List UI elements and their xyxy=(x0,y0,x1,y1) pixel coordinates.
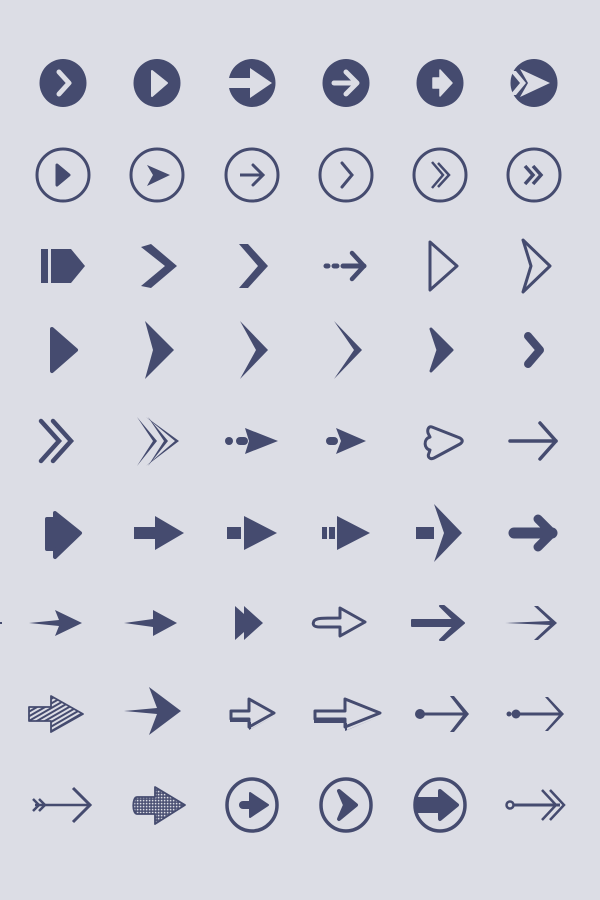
icon: r2c6 outline circle bold double chevron xyxy=(508,149,560,201)
icon: r4c5 chevron xyxy=(431,329,452,371)
icon: r9c4 circle with chevron xyxy=(321,779,371,831)
icon: edge sliver xyxy=(0,622,2,624)
icon: r7c4 outline long arrow xyxy=(313,608,365,636)
icon: r8c5 dot line chevron xyxy=(415,696,469,732)
icon: r6c1 rounded block arrow xyxy=(47,513,80,557)
icon: r2c5 outline circle double chevron xyxy=(414,149,466,201)
icon: r6c4 two squares and triangle xyxy=(322,516,370,550)
icon: r1c2 filled circle play xyxy=(134,59,180,107)
icon: r1c6 filled circle double chevron xyxy=(510,59,558,107)
icon: r6c3 square and triangle xyxy=(227,516,277,550)
icon: r4c1 rounded triangle xyxy=(52,329,76,371)
icon: r6c5 bar and dart xyxy=(416,504,462,562)
icon: r5c4 small dart arrow xyxy=(326,428,366,454)
icon: r8c3 outline block arrow with shadow xyxy=(230,699,276,730)
icon: r8c1 hatched arrow xyxy=(29,696,83,732)
icon: r6c6 thick rounded arrow xyxy=(514,519,552,547)
icon: r3c1 bar and pentagon xyxy=(41,249,85,283)
icon: r5c5 outline bullet arrow xyxy=(425,427,462,459)
icon: r7c5 thick line arrow xyxy=(412,606,464,640)
icon: r1c1 filled circle chevron xyxy=(40,59,86,107)
icon: r5c1 double chevron xyxy=(41,421,71,461)
icon: r7c2 tapered block arrow xyxy=(124,610,177,636)
icon: r1c4 filled circle arrow xyxy=(322,59,370,107)
icon: r3c5 outline triangle xyxy=(430,242,457,290)
icon: r9c5 circle with big arrow xyxy=(415,779,465,831)
icon: r4c4 thin chevron xyxy=(334,321,362,379)
icon: r8c6 dots line chevron xyxy=(506,697,564,731)
icon: r9c6 ring line double chevron xyxy=(506,790,564,820)
icon: r3c6 outline dart xyxy=(523,240,550,292)
icon: r3c2 wide chevron xyxy=(141,244,177,288)
icon: r5c6 line arrow xyxy=(510,423,556,459)
icon: r4c2 dart xyxy=(145,321,174,379)
icon: r9c3 circle with arrow xyxy=(227,779,277,831)
icon: r1c5 filled circle block arrow xyxy=(416,59,464,107)
icon: r2c1 outline circle play xyxy=(37,149,89,201)
icon: r5c3 dot and dart arrow xyxy=(225,428,278,454)
icon: r8c2 long-tail dart xyxy=(124,687,181,735)
icon: r3c3 thick chevron xyxy=(239,244,268,288)
icon: r8c4 long outline block arrow with shadow xyxy=(314,699,383,731)
icon: r2c4 outline circle chevron xyxy=(320,149,372,201)
icon: r2c3 outline circle arrow xyxy=(226,149,278,201)
icon: r2c2 outline circle dart xyxy=(131,149,183,201)
icon: r9c2 crosshatch arrow xyxy=(133,787,185,824)
icon: r7c3 fast forward xyxy=(235,606,263,640)
icon: r6c2 block arrow xyxy=(134,516,184,550)
icon: r4c3 concave chevron xyxy=(240,321,268,379)
icon: r5c2 thin double chevron xyxy=(137,417,179,466)
icon: r3c4 dashed arrow xyxy=(326,253,364,279)
icon: r7c6 thin tapered arrow xyxy=(505,606,557,640)
icon: r9c1 feathered arrow xyxy=(33,788,90,822)
icon: r1c3 filled circle cut arrow xyxy=(226,59,276,107)
icon: r4c6 bold rounded chevron xyxy=(528,336,540,364)
icon: r7c1 tapered arrow xyxy=(29,610,82,636)
